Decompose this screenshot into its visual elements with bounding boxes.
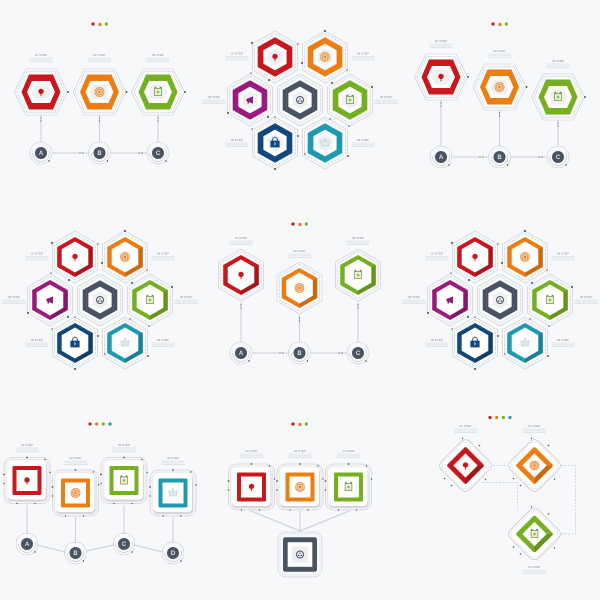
orange hexagon [277, 262, 322, 314]
orange hexagon [473, 64, 527, 110]
connector ticks [40, 117, 159, 154]
node A [16, 533, 38, 555]
node C [547, 146, 569, 168]
red hexagon [414, 54, 469, 100]
node C: C [156, 151, 161, 157]
step 3 label: 03 STEP [342, 449, 355, 453]
step 3 label: 03 STEP [118, 443, 130, 447]
node C [147, 142, 169, 164]
step 3 label: 03 STEP [352, 236, 364, 240]
panel: seven hexagon cluster top [202, 30, 398, 170]
node A [230, 342, 252, 364]
legend dots [488, 416, 512, 419]
step 1 label: 01 STEP [21, 443, 33, 447]
slate target square [278, 532, 322, 577]
navy hexagon [452, 317, 498, 369]
converging connectors [251, 511, 349, 531]
step 2 label [288, 449, 312, 458]
outline nodes [27, 230, 173, 370]
step labels: 03 STEP [8, 295, 20, 299]
step 1 label [30, 53, 52, 62]
dashed connectors [482, 466, 576, 534]
outline nodes [427, 230, 573, 370]
red hexagon [252, 31, 298, 83]
step 2 label: 02 STEP [69, 456, 82, 460]
step 1 label [454, 424, 477, 433]
step 1 label [240, 449, 263, 458]
step labels: 05 STEP [231, 138, 243, 142]
panel: stepped hexagons A B C [414, 22, 586, 168]
step labels: 05 STEP [31, 338, 43, 342]
step 2 label: 02 STEP [528, 424, 541, 428]
connectors [241, 302, 358, 353]
orange hexagon [502, 231, 548, 283]
step labels [202, 52, 398, 147]
step 3 label: 03 STEP [552, 59, 564, 63]
step labels: 04 STEP [380, 95, 392, 99]
green hexagon [328, 74, 372, 126]
step 2 label: 02 STEP [493, 49, 506, 53]
node A [430, 146, 452, 168]
step 2 label [64, 456, 87, 465]
teal hexagon [502, 317, 548, 369]
node A [30, 142, 52, 164]
step 2 label [523, 424, 546, 433]
teal square [149, 469, 197, 517]
node A: A [439, 155, 444, 161]
red square [228, 463, 275, 511]
green hexagon [128, 274, 172, 326]
green hexagon [336, 249, 380, 301]
step labels: 06 STEP [157, 338, 169, 342]
connector ticks [240, 304, 359, 354]
connectors [41, 115, 158, 153]
step labels: 05 STEP [431, 338, 443, 342]
node A: A [25, 542, 30, 548]
node C: C [122, 542, 127, 548]
step 3 label [146, 53, 170, 62]
step 1 label: 01 STEP [245, 449, 258, 453]
green hexagon [528, 274, 572, 326]
panel: three hexagons A B C [14, 22, 186, 164]
step 1 label [230, 236, 252, 245]
connector ticks [440, 102, 559, 158]
legend dots [291, 222, 308, 226]
navy hexagon [252, 117, 298, 169]
step labels: 04 STEP [180, 295, 192, 299]
purple hexagon [228, 74, 272, 126]
node C: C [356, 351, 361, 357]
step 1 label: 01 STEP [435, 39, 447, 43]
step 3 label [112, 443, 136, 452]
panel: three squares into one [228, 422, 372, 577]
node B [64, 542, 86, 564]
legend dots [491, 22, 508, 26]
node B [488, 146, 510, 168]
panel: upright hexagons A B C [218, 222, 380, 364]
purple hexagon [428, 274, 472, 326]
step 3 label: 03 STEP [528, 565, 541, 569]
node B: B [73, 551, 78, 557]
step 1 label [16, 443, 38, 452]
step 2 label: 02 STEP [293, 249, 306, 253]
green square [100, 457, 148, 504]
green hexagon with clock icon [132, 69, 186, 115]
step labels [402, 252, 598, 347]
red hexagon [452, 231, 498, 283]
step 2 label [488, 49, 511, 58]
panel: four squares A B C D [3, 422, 197, 564]
node D [162, 542, 184, 564]
step labels: 04 STEP [580, 295, 592, 299]
node A: A [39, 151, 44, 157]
step 1 label [430, 39, 452, 48]
orange square [276, 463, 324, 511]
orange hexagon with target icon [73, 69, 127, 115]
teal hexagon [102, 317, 148, 369]
step 2 label: 02 STEP [294, 449, 306, 453]
step 4 label: 04 STEP [167, 456, 179, 460]
step labels: 01 STEP [431, 252, 443, 256]
step 1 label: 01 STEP [459, 424, 472, 428]
panel: seven hexagon cluster right [402, 230, 598, 370]
step labels: 06 STEP [557, 338, 569, 342]
red hexagon [52, 231, 98, 283]
node C: C [556, 155, 561, 161]
step 1 label: 01 STEP [235, 236, 247, 240]
orange hexagon [102, 231, 148, 283]
node C [347, 342, 369, 364]
node A: A [239, 351, 244, 357]
step 2 label: 02 STEP [93, 53, 106, 57]
step 3 label [523, 565, 546, 574]
step 2 label [288, 249, 311, 258]
panel: seven hexagon cluster left [2, 230, 198, 370]
step 4 label [162, 456, 184, 465]
outline nodes [227, 30, 373, 170]
orange square [52, 469, 99, 517]
step 2 label [88, 53, 111, 62]
legend dots [291, 422, 308, 426]
red hexagon [218, 249, 264, 301]
slate hexagon [78, 274, 122, 326]
step labels: 03 STEP [208, 95, 220, 99]
teal hexagon [302, 117, 348, 169]
step labels: 02 STEP [557, 252, 569, 256]
green square [325, 463, 372, 511]
step 3 label [346, 236, 370, 245]
step labels: 02 STEP [157, 252, 169, 256]
connectors [441, 100, 558, 157]
red square [3, 457, 51, 504]
node D: D [171, 551, 176, 557]
connectors [27, 505, 173, 552]
node B: B [97, 151, 102, 157]
step labels: 02 STEP [357, 52, 369, 56]
purple hexagon [28, 274, 72, 326]
step 3 label [546, 59, 570, 68]
panel: three diamonds [437, 416, 576, 574]
node B [288, 342, 310, 364]
node B: B [297, 351, 302, 357]
step labels: 01 STEP [31, 252, 43, 256]
green diamond [506, 506, 563, 562]
legend dots [91, 22, 108, 26]
red diamond [437, 437, 494, 494]
step 1 label: 01 STEP [35, 53, 47, 57]
orange hexagon [302, 31, 348, 83]
legend dots [88, 422, 112, 426]
step 3 label: 03 STEP [152, 53, 164, 57]
orange diamond [506, 437, 563, 494]
step 3 label [337, 449, 360, 458]
navy hexagon [52, 317, 98, 369]
red hexagon with pin icon [14, 69, 69, 115]
node B: B [497, 155, 502, 161]
step labels: 01 STEP [231, 52, 243, 56]
step labels: 03 STEP [408, 295, 420, 299]
step labels [2, 252, 198, 347]
node C [113, 533, 135, 555]
slate hexagon [278, 74, 322, 126]
slate hexagon [478, 274, 522, 326]
node B [88, 142, 110, 164]
step labels: 06 STEP [357, 138, 369, 142]
green hexagon [532, 74, 586, 120]
